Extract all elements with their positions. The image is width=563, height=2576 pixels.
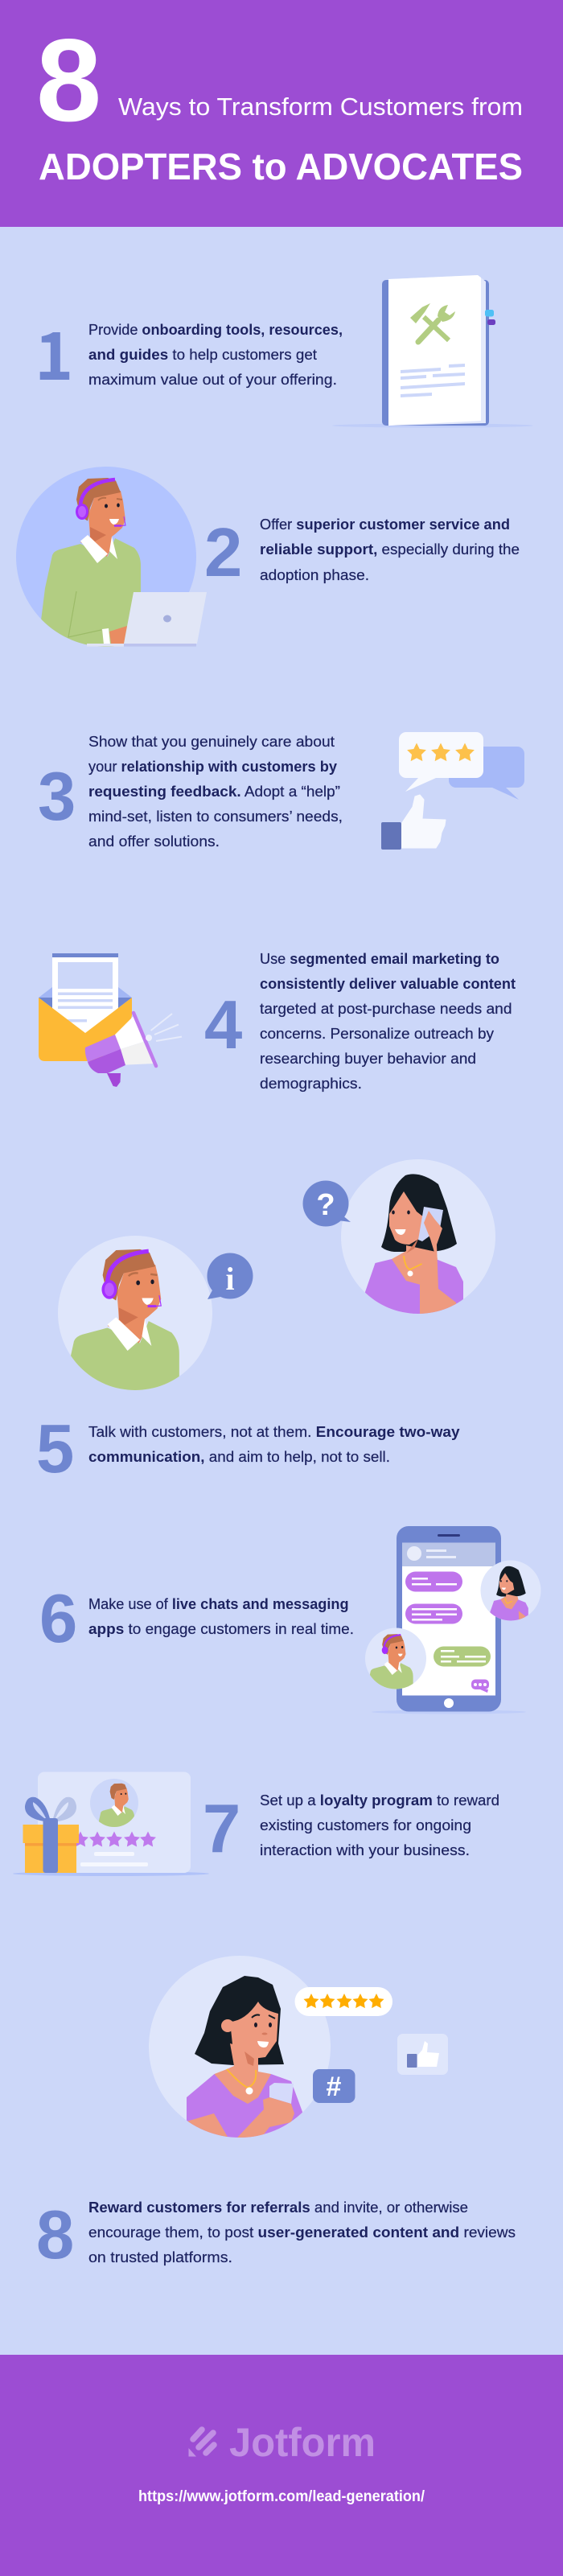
- panel: footer: [0, 2355, 563, 2576]
- text block: step 4: concerns. Personalize outreach by: [260, 1026, 494, 1042]
- icon: guide book with tools: [332, 275, 533, 428]
- icon: info bubble: [208, 1253, 253, 1299]
- number 3: 3: [38, 759, 76, 835]
- text block: step 3: requesting feedback. Adopt a “help”: [88, 784, 340, 800]
- text block: step 1: [88, 322, 343, 388]
- icon: thumbs up card: [397, 2034, 448, 2075]
- text block: step 4: [260, 951, 516, 1092]
- panel: step 2: [16, 467, 520, 660]
- title: main headline: ADOPTERS to ADVOCATES: [39, 146, 523, 187]
- text block: step 5: [88, 1424, 460, 1465]
- text block: step 8: on trusted platforms.: [88, 2249, 232, 2265]
- text block: step 8: [88, 2199, 516, 2265]
- icon: question bubble: ?: [316, 1188, 335, 1222]
- text block: step 2: [260, 516, 520, 583]
- text block: step 4: Use segmented email marketing to: [260, 951, 499, 967]
- number 5: 5: [36, 1411, 74, 1488]
- panel: step 5: [36, 1159, 495, 1488]
- text block: step 1: maximum value out of your offering.: [88, 372, 337, 388]
- number 1: 1: [35, 303, 73, 399]
- panel: step 8: [36, 1956, 516, 2274]
- text block: step 4: targeted at post-purchase needs and: [260, 1001, 512, 1017]
- text block: step 5: communication, and aim to help, not to sell.: [88, 1449, 390, 1465]
- text block: step 4: researching buyer behavior and: [260, 1051, 476, 1067]
- text block: step 1: Provide onboarding tools, resources,: [88, 322, 343, 338]
- panel: step 6: [39, 1526, 540, 1722]
- icon: small woman avatar: [481, 1561, 540, 1623]
- icon: woman with phone: [149, 1956, 331, 2148]
- icon: woman on phone: [341, 1159, 495, 1319]
- icon: small agent avatar: [365, 1628, 426, 1689]
- text block: step 6: apps to engage customers in real time.: [88, 1621, 354, 1637]
- text block: step 2: reliable support, especially during the: [260, 541, 520, 558]
- text block: step 2: Offer superior customer service and: [260, 516, 510, 533]
- text block: step 8: encourage them, to post user-generated content and reviews: [88, 2224, 516, 2241]
- text block: step 7: [260, 1792, 499, 1858]
- icon: support agent: [58, 1236, 212, 1390]
- panel: step 7: [13, 1772, 499, 1876]
- number 6: 6: [39, 1581, 77, 1657]
- text block: step 4: demographics.: [260, 1076, 362, 1092]
- text block: step 4: consistently deliver valuable content: [260, 976, 516, 992]
- icon: rating speech bubbles: [399, 732, 524, 800]
- icon: thumbs up: [381, 795, 446, 850]
- icon: hashtag tile: #: [327, 2072, 342, 2102]
- text block: step 1: and guides to help customers get: [88, 347, 317, 363]
- text block: step 6: [88, 1596, 354, 1637]
- text block: step 5: Talk with customers, not at them. Encourage two-way: [88, 1424, 460, 1440]
- text block: step 3: and offer solutions.: [88, 833, 220, 850]
- panel: step 4: [39, 951, 516, 1092]
- icon: envelope and megaphone: [39, 953, 182, 1087]
- panel: step 3: [38, 732, 524, 850]
- text block: step 6: Make use of live chats and messaging: [88, 1596, 349, 1612]
- number 4: 4: [204, 987, 242, 1064]
- icon: smartphone chat: [372, 1526, 526, 1714]
- title: subtitle line: Ways to Transform Customers from: [118, 93, 523, 121]
- text block: step 2: adoption phase.: [260, 567, 369, 583]
- icon: five star pill: [294, 1987, 392, 2016]
- text block: step 7: Set up a loyalty program to reward: [260, 1792, 499, 1809]
- text block: step 3: [88, 734, 343, 850]
- panel: step 1: [35, 275, 533, 428]
- title: big number 8: 8: [36, 14, 101, 146]
- number 7: 7: [203, 1791, 240, 1867]
- panel: header banner: [0, 0, 563, 227]
- text block: step 7: interaction with your business.: [260, 1842, 470, 1858]
- icon: support agent at laptop: [16, 467, 207, 660]
- icon: hashtag tile: [313, 2069, 355, 2103]
- number 8: 8: [36, 2197, 74, 2274]
- text block: step 3: Show that you genuinely care about: [88, 734, 335, 750]
- logo: Jotform: Jotform: [229, 2420, 376, 2465]
- text block: step 3: mind-set, listen to consumers’ needs,: [88, 809, 343, 825]
- text block: step 7: existing customers for ongoing: [260, 1817, 471, 1833]
- icon: loyalty card and gift: [13, 1772, 209, 1876]
- text block: step 3: your relationship with customers by: [88, 759, 337, 775]
- footer URL: https://www.jotform.com/lead-generation/: [138, 2488, 425, 2505]
- icon: question bubble: [302, 1181, 351, 1226]
- text block: step 8: Reward customers for referrals and invite, or otherwise: [88, 2199, 468, 2216]
- icon: info bubble: i: [225, 1261, 235, 1297]
- number 2: 2: [204, 515, 242, 591]
